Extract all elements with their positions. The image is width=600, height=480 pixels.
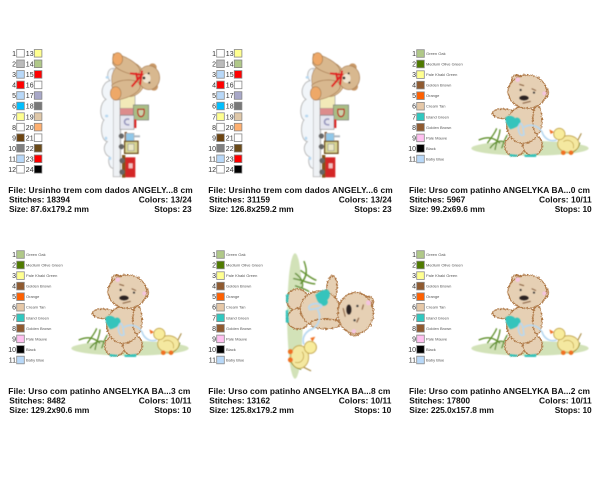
design details	[409, 386, 592, 415]
color legend: 1	[212, 51, 216, 58]
color legend: 4	[412, 284, 416, 291]
color legend: 4	[212, 284, 216, 291]
color legend: Medium Olive Green	[426, 262, 463, 268]
color legend: 20	[226, 125, 234, 132]
illustration: bear on train and blocks	[301, 53, 360, 178]
design details: Stitches: 31159	[209, 194, 270, 204]
color legend: 4	[412, 83, 416, 90]
illustration: bear with duckling	[471, 275, 589, 357]
color legend: 6	[212, 104, 216, 111]
color legend: 23	[26, 156, 34, 164]
color legend: 7	[12, 315, 16, 322]
color legend: Pale Mauve	[426, 135, 448, 140]
color legend: 3	[212, 72, 216, 79]
color legend: Medium Olive Green	[226, 262, 263, 268]
design details	[8, 185, 193, 214]
color legend: 14	[26, 62, 34, 68]
color legend: Black	[26, 347, 36, 352]
color legend: 12	[8, 167, 16, 174]
color legend: 13	[226, 51, 234, 58]
color legend: 10	[208, 347, 216, 354]
color legend: Island Green	[226, 315, 249, 320]
design details: File: Urso com patinho ANGELYKA BA...3 cm	[8, 386, 190, 396]
color legend: 11	[9, 358, 16, 364]
color legend: 18	[226, 104, 234, 111]
color legend: 11	[409, 358, 416, 364]
color legend: Cream Tan	[426, 104, 446, 109]
color legend: Baby Blue	[226, 358, 245, 362]
color legend: Green Oak	[26, 252, 46, 257]
color legend: 3	[12, 72, 16, 79]
color legend: Black	[426, 146, 436, 151]
color legend: Green Oak	[426, 51, 446, 56]
color legend: 11	[409, 156, 416, 164]
color legend: 15	[26, 72, 34, 79]
panel: bear with duckling 3	[408, 251, 592, 415]
color legend: 9	[212, 336, 216, 343]
design details: Stitches: 5967	[409, 194, 466, 204]
color legend: 10	[408, 347, 416, 354]
design details	[8, 386, 192, 415]
color legend: 5	[12, 93, 16, 100]
color legend: Golden Brown	[226, 284, 251, 289]
design details: Colors: 10/11	[339, 395, 392, 405]
color legend: 1	[12, 51, 16, 58]
color legend: Island Green	[426, 114, 449, 119]
design details: Size: 126.8x259.2 mm	[209, 204, 294, 214]
design details: Colors: 13/24	[339, 194, 392, 204]
color legend: 22	[26, 146, 34, 153]
color legend: 9	[412, 336, 416, 343]
color legend: 4	[12, 284, 16, 291]
color legend: Cream Tan	[226, 305, 246, 310]
design details: File: Ursinho trem com dados ANGELY...8 cm	[8, 185, 193, 195]
color legend	[408, 251, 463, 364]
color legend: 6	[212, 305, 216, 312]
color legend: 16	[26, 83, 34, 90]
color legend: Baby Blue	[426, 358, 445, 362]
color legend: Orange	[426, 294, 440, 299]
color legend: Pale Mauve	[426, 336, 448, 341]
design details: Stitches: 8482	[9, 395, 66, 405]
design details: Size: 125.8x179.2 mm	[209, 405, 294, 415]
color legend: Island Green	[26, 315, 49, 320]
color legend: Orange	[426, 93, 440, 98]
color legend: Golden Brown	[226, 326, 251, 331]
color legend: 3	[412, 273, 416, 280]
design details: Stops: 23	[354, 204, 392, 214]
design details: Colors: 10/11	[539, 395, 592, 405]
color legend: 9	[212, 135, 216, 142]
color legend: Golden Brown	[26, 326, 51, 331]
color legend: 10	[408, 146, 416, 153]
color legend: 7	[212, 114, 216, 121]
design details: Size: 87.6x179.2 mm	[9, 204, 89, 214]
color legend: Green Oak	[426, 252, 446, 257]
design details: Stops: 10	[555, 204, 592, 214]
color legend: 6	[412, 305, 416, 312]
color legend: Medium Olive Green	[426, 62, 463, 66]
color legend: Pale Mauve	[26, 336, 48, 341]
panel: train bear 2	[208, 50, 393, 214]
color legend: 8	[412, 125, 416, 132]
illustration: bear with duckling rotated 90 degrees	[286, 253, 373, 379]
design details: Stitches: 13162	[209, 395, 270, 405]
color legend: 7	[412, 315, 416, 322]
design details: Size: 129.2x90.6 mm	[9, 405, 89, 415]
color legend: Pale Khaki Green	[426, 72, 457, 77]
color legend: Black	[426, 347, 436, 352]
design details	[208, 386, 392, 415]
color legend: 20	[26, 125, 34, 132]
color legend: Pale Khaki Green	[426, 273, 457, 278]
color legend	[8, 50, 42, 174]
color legend: 22	[226, 146, 234, 153]
illustration: bear with duckling	[471, 75, 589, 157]
color legend: 8	[212, 326, 216, 333]
panel: rotated bear with duckling	[208, 251, 392, 415]
color legend: 5	[412, 93, 416, 100]
color legend: 15	[226, 72, 234, 79]
illustration: bear on train and blocks	[101, 53, 160, 178]
color legend: Golden Brown	[26, 284, 51, 289]
color legend: 5	[212, 93, 216, 100]
color legend: 3	[212, 273, 216, 280]
color legend: 11	[209, 156, 216, 164]
color legend: 13	[26, 51, 34, 58]
color legend: Orange	[26, 294, 40, 299]
panel: bear with duckling 1	[408, 50, 592, 214]
color legend: Golden Brown	[426, 326, 451, 331]
color legend: 8	[212, 125, 216, 132]
color legend: 17	[26, 93, 34, 100]
color legend: 2	[12, 62, 16, 68]
color legend: 2	[412, 62, 416, 68]
illustration: bear with duckling	[71, 275, 189, 357]
color legend: 7	[212, 315, 216, 322]
color legend: 2	[412, 262, 416, 270]
panel: bear with duckling 2	[8, 251, 192, 415]
design details: Stops: 10	[154, 405, 192, 415]
color legend: Pale Khaki Green	[226, 273, 257, 278]
color legend: 3	[12, 273, 16, 280]
color legend: 10	[208, 146, 216, 153]
color legend: 5	[412, 294, 416, 301]
design details	[208, 185, 393, 214]
color legend	[208, 50, 242, 174]
color legend: 5	[12, 294, 16, 301]
color legend: 2	[12, 262, 16, 270]
color legend: 16	[226, 83, 234, 90]
color legend: Baby Blue	[26, 358, 45, 362]
color legend: 6	[12, 305, 16, 312]
design details: Stitches: 17800	[409, 395, 470, 405]
design details: File: Ursinho trem com dados ANGELY...6 cm	[208, 185, 393, 195]
color legend: 1	[412, 51, 416, 58]
color legend: 1	[12, 252, 16, 259]
color legend: 2	[212, 62, 216, 68]
color legend: 9	[12, 336, 16, 343]
design details: Colors: 13/24	[139, 194, 192, 204]
color legend: 19	[26, 114, 34, 121]
color legend	[208, 251, 263, 364]
color legend: 4	[12, 83, 16, 90]
design details: File: Urso com patinho ANGELYKA BA...2 cm	[409, 386, 590, 396]
color legend: 7	[12, 114, 16, 121]
color legend: 12	[208, 167, 216, 174]
color legend: 9	[12, 135, 16, 142]
design details: Stops: 10	[354, 405, 392, 415]
color legend: 8	[412, 326, 416, 333]
color legend: 21	[26, 135, 34, 142]
color legend: Green Oak	[226, 252, 246, 257]
color legend: 7	[412, 114, 416, 121]
color legend: Black	[226, 347, 236, 352]
color legend: Golden Brown	[426, 83, 451, 88]
color legend	[408, 50, 463, 164]
color legend: 24	[226, 167, 234, 174]
color legend	[8, 251, 63, 364]
design details: File: Urso com patinho ANGELYKA BA...8 cm	[208, 386, 390, 396]
color legend: 19	[226, 114, 234, 121]
color legend: Cream Tan	[26, 305, 46, 310]
color legend: 1	[212, 252, 216, 259]
design details: Colors: 10/11	[139, 395, 192, 405]
color legend: 23	[226, 156, 234, 164]
color legend: 6	[12, 104, 16, 111]
design details: Size: 99.2x69.6 mm	[409, 204, 485, 214]
color legend: 18	[26, 104, 34, 111]
color legend: 10	[8, 347, 16, 354]
color legend: 17	[226, 93, 234, 100]
color legend: 9	[412, 135, 416, 142]
color legend: Cream Tan	[426, 305, 446, 310]
color legend: Baby Blue	[426, 156, 445, 162]
color legend: 11	[9, 156, 16, 164]
color legend: 21	[226, 135, 234, 142]
color legend: Orange	[226, 294, 240, 299]
color legend: 3	[412, 72, 416, 79]
design details: Colors: 10/11	[539, 194, 592, 204]
color legend: Golden Brown	[426, 125, 451, 130]
design details: File: Urso com patinho ANGELYKA BA...0 cm	[409, 185, 590, 195]
color legend: Golden Brown	[426, 284, 451, 289]
color legend: 1	[412, 252, 416, 259]
panel: train bear 1	[8, 50, 193, 214]
design details: Size: 225.0x157.8 mm	[409, 405, 494, 415]
color legend: 10	[8, 146, 16, 153]
color legend: Pale Mauve	[226, 336, 248, 341]
color legend: 4	[212, 83, 216, 90]
color legend: 24	[26, 167, 34, 174]
color legend: 2	[212, 262, 216, 270]
color legend: 8	[12, 326, 16, 333]
design details	[409, 185, 592, 214]
color legend: 8	[12, 125, 16, 132]
design details: Stops: 10	[555, 405, 592, 415]
design details: Stitches: 18394	[9, 194, 70, 204]
color legend: 5	[212, 294, 216, 301]
design details: Stops: 23	[154, 204, 192, 214]
color legend: Medium Olive Green	[26, 262, 63, 268]
color legend: 14	[226, 62, 234, 68]
color legend: Island Green	[426, 315, 449, 320]
color legend: 6	[412, 104, 416, 111]
color legend: Pale Khaki Green	[26, 273, 57, 278]
color legend: 11	[209, 358, 216, 364]
